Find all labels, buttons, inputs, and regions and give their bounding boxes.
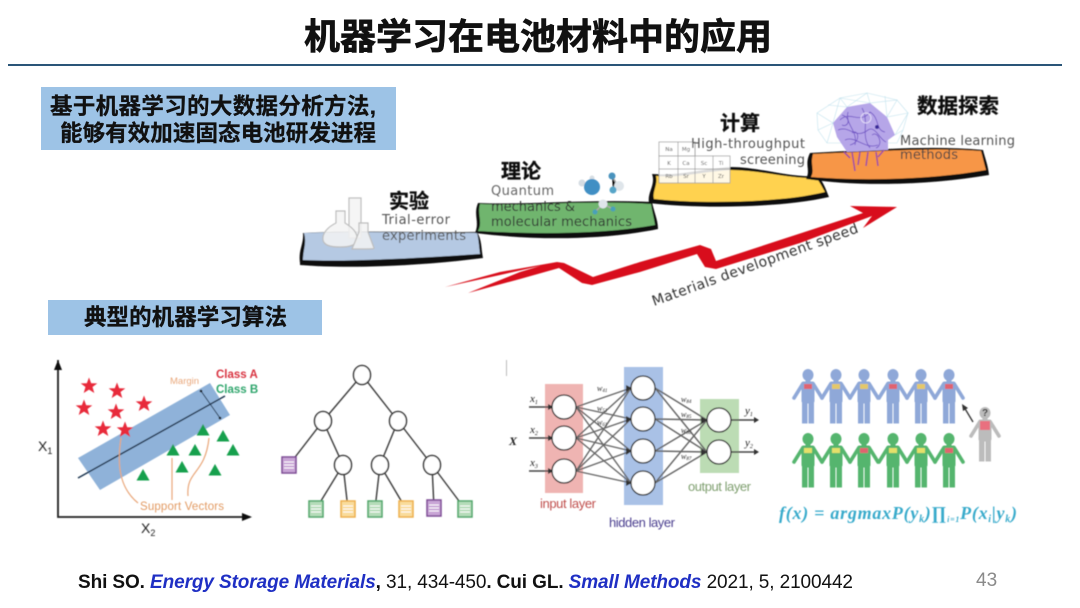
icon: AI brain	[817, 93, 908, 171]
text: quantum mechanics and molecular mechanics	[491, 184, 632, 230]
heading: data exploration: 数据探索	[917, 95, 999, 118]
table: periodic table: Sr	[683, 174, 690, 180]
chart: neural network: x	[530, 457, 535, 469]
table: periodic table: Rb	[665, 174, 673, 180]
chart: neural network: 1	[750, 412, 753, 418]
formula: |y	[992, 503, 1006, 523]
icon group: blue class	[794, 370, 963, 423]
formula: k	[1005, 514, 1010, 525]
text: machine learning methods	[900, 134, 1015, 163]
chart: decision tree	[282, 366, 472, 517]
text: high-throughput screening: High-throughput	[691, 137, 805, 152]
chart: neural network: 51	[602, 409, 607, 414]
chart: neural network: 84	[686, 400, 692, 405]
chart: neural network: x	[530, 424, 535, 436]
chart: support vector machine: X	[141, 520, 150, 536]
formula: f(x) = argmaxP(y	[779, 503, 918, 523]
chart: neural network: 3	[534, 464, 538, 470]
formula: )	[1009, 503, 1017, 524]
icon: molecules	[578, 172, 624, 214]
section heading: typical algorithms	[48, 300, 322, 335]
icon: flasks	[323, 198, 374, 249]
heading: experiment: 实验	[389, 189, 429, 213]
text: quantum mechanics and molecular mechanics: Quantum	[491, 184, 554, 199]
chart: neural network: w	[597, 418, 602, 427]
formula: i=1	[947, 515, 959, 524]
arrow: assign unknown	[962, 404, 973, 422]
formula: )∏	[923, 503, 947, 524]
text: quantum mechanics and molecular mechanics: molecular mechanics	[491, 215, 632, 230]
arrow: materials development speed	[445, 206, 897, 310]
table: periodic table: Mg	[682, 147, 690, 153]
table: periodic table	[659, 142, 730, 183]
chart: neural network: w	[681, 426, 686, 435]
chart: neural network: input layer	[540, 496, 597, 511]
chart: support vector machine: Support Vectors	[140, 501, 224, 513]
chart: neural network: y	[745, 437, 750, 449]
table: periodic table: Ca	[682, 161, 690, 167]
chart: support vector machine: 1	[47, 446, 52, 456]
chart: neural network: 86	[686, 431, 692, 436]
text: trial-error experiments: Trial-error	[381, 213, 451, 228]
section heading: typical algorithms: 典型的机器学习算法	[84, 305, 287, 330]
chart: support vector machine: 2	[150, 528, 155, 538]
chart: neural network: 61	[602, 423, 607, 428]
formula: P(x	[959, 503, 988, 524]
chart: neural network: x	[530, 393, 535, 405]
table: periodic table: K	[667, 161, 671, 167]
chart: naive Bayes classification	[779, 370, 1017, 525]
text: trial-error experiments: experiments	[382, 229, 466, 244]
step: computation plate	[649, 167, 829, 207]
chart: neural network: y	[745, 405, 750, 417]
text: machine learning methods: methods	[900, 148, 958, 163]
staircase diagram	[300, 93, 1015, 310]
table: periodic table: Sc	[701, 161, 707, 167]
heading: computation: 计算	[720, 112, 760, 135]
text: machine learning methods: Machine learning	[900, 134, 1015, 149]
chart: neural network: 41	[602, 389, 607, 394]
arrow: materials development speed: Materials development speed	[650, 221, 860, 310]
chart: neural network: w	[597, 384, 602, 393]
heading: theory: 理论	[501, 160, 541, 183]
icon group: green class	[794, 434, 963, 487]
chart: neural network: w	[681, 452, 686, 461]
table: periodic table: Na	[665, 147, 673, 153]
chart: support vector machine: Class B	[216, 384, 258, 396]
text: high-throughput screening: screening	[740, 153, 805, 168]
text: trial-error experiments	[381, 213, 466, 244]
chart: neural network: 1	[535, 400, 538, 406]
table: periodic table: Zr	[718, 174, 725, 180]
formula: i	[988, 514, 991, 525]
callout: big data analysis: 能够有效加速固态电池研发进程	[60, 121, 376, 146]
chart: neural network: w	[681, 395, 686, 404]
step: theory plate	[475, 201, 658, 238]
step: data exploration plate	[806, 148, 989, 184]
text: high-throughput screening	[691, 137, 805, 168]
formula: k	[919, 514, 924, 525]
text: quantum mechanics and molecular mechanics: mechanics &	[491, 200, 575, 215]
icon: unknown person: ?	[982, 408, 988, 419]
chart: support vector machine: Class A	[216, 369, 258, 381]
chart: support vector machine: Margin	[170, 376, 199, 387]
chart: support vector machine: X	[38, 438, 47, 454]
citation: Shi SO. Energy Storage Materials, 31, 434-450. Cui GL. Small Methods 2021, 5, 2100442	[78, 572, 853, 593]
title: 机器学习在电池材料中的应用	[304, 16, 772, 57]
page number: 43	[976, 570, 997, 591]
chart: neural network: X	[508, 434, 518, 448]
table: periodic table: Y	[701, 174, 706, 180]
chart: neural network: w	[681, 410, 686, 419]
chart: neural network: 87	[686, 457, 692, 462]
chart: neural network: 2	[750, 444, 753, 450]
chart: neural network: hidden layer	[609, 515, 676, 530]
chart: neural network: w	[597, 404, 602, 413]
chart: neural network: 2	[535, 431, 538, 437]
table: periodic table: Ti	[718, 161, 724, 167]
step: experiment plate	[300, 232, 483, 267]
chart: neural network: 85	[686, 415, 692, 420]
chart: neural network: output layer	[688, 479, 752, 494]
chart: neural network	[506, 360, 759, 530]
callout: big data analysis: 基于机器学习的大数据分析方法,	[50, 93, 376, 119]
chart: support vector machine	[38, 360, 258, 538]
icon: unknown person	[971, 408, 999, 461]
callout: big data analysis	[41, 87, 396, 150]
